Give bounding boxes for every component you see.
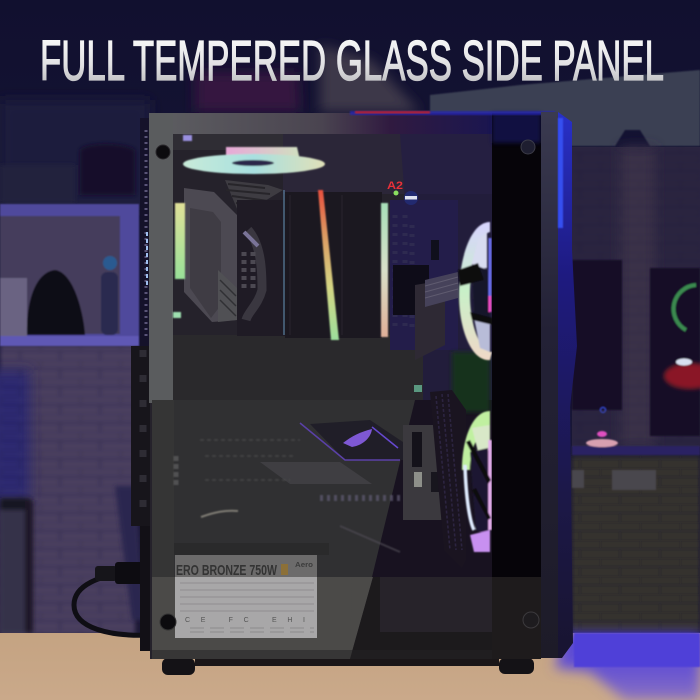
debug LED readout: A2 <box>387 180 403 192</box>
icon: book stack <box>0 278 27 336</box>
screw bottom right <box>523 612 539 628</box>
PSU model text: ERO BRONZE 750W <box>176 562 278 579</box>
lower interior <box>152 400 494 659</box>
RAM heatsink block <box>285 192 382 338</box>
ROG motherboard shroud <box>260 420 418 484</box>
screw bottom left <box>160 614 176 630</box>
case right edge with blue light <box>558 112 577 658</box>
case front panel edge <box>131 118 153 651</box>
screw top right <box>521 140 535 154</box>
CPU VRM pipe and bolts <box>237 190 285 336</box>
icon: small figure <box>101 256 118 335</box>
screw top left <box>156 145 170 159</box>
icon: bronze badge <box>281 564 288 575</box>
light motherboard corner and IO <box>403 385 443 520</box>
background: chair and dark box <box>0 486 145 633</box>
table surface <box>0 633 700 700</box>
green glow behind fans <box>452 352 490 412</box>
RGB RAM strip right <box>381 203 388 337</box>
PC case <box>131 111 577 675</box>
motherboard chipset heatsink <box>184 180 283 322</box>
background: monitor and speaker at right <box>572 260 700 490</box>
motherboard right side <box>390 200 458 360</box>
glass reflection upper frame <box>149 113 494 403</box>
icon: green ring light <box>674 285 696 330</box>
PSU shroud <box>174 543 329 555</box>
power cable <box>74 562 153 635</box>
icon: blue badge <box>404 191 418 205</box>
top fan ring <box>183 135 325 174</box>
PSU label <box>175 555 317 638</box>
case interior <box>150 113 495 659</box>
case feet <box>162 658 534 675</box>
icon: ROG logo <box>343 429 372 447</box>
RGB RAM strip centre <box>318 190 339 340</box>
PSU certification marks: CE FC EHI <box>185 617 305 624</box>
PSU spec rows <box>180 583 314 611</box>
braided cables <box>430 390 466 568</box>
icon: green status LED <box>394 190 398 196</box>
top edge light <box>350 111 555 115</box>
right dark side band <box>492 113 541 659</box>
PSU brand text: Aero <box>295 562 313 569</box>
case right frame <box>541 112 558 658</box>
RGB fan upper <box>458 222 493 360</box>
ribbon cable <box>425 272 458 307</box>
RGB fan lower <box>462 411 491 552</box>
motherboard lower components <box>176 440 410 552</box>
RGB RAM strip left <box>173 203 185 318</box>
icon: pink desk light <box>586 408 618 447</box>
icon: helmet figurine <box>27 270 85 335</box>
dark shapes above shelf <box>0 144 135 203</box>
shelf with figurines <box>0 204 139 346</box>
